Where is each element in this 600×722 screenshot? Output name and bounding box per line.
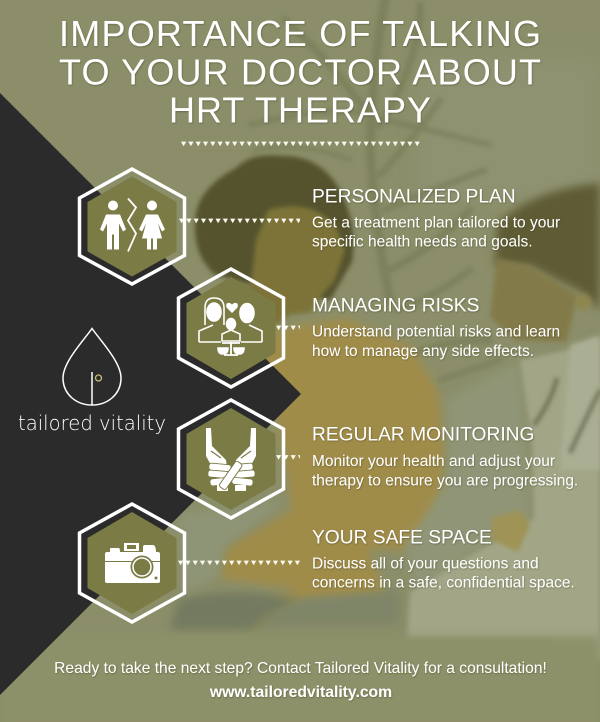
lower left pale area [180,500,285,592]
doctor hair [495,183,600,310]
title: IMPORTANCE OF TALKING [59,13,541,54]
call to action: Ready to take the next step? Contact Tailored Vitality for a consultation! [54,660,547,677]
woman hair [195,155,354,300]
item 3 text: REGULAR MONITORING [312,424,534,446]
hexagon 2: managing risks [178,269,284,387]
title [59,13,541,130]
doctor coat [407,340,600,660]
connector 3 [275,454,300,460]
item 2 text: MANAGING RISKS [312,296,479,316]
hexagon 1: personalized plan [80,169,184,284]
item 3 text: therapy to ensure you are progressing. [312,472,578,490]
item 1 text: specific health needs and goals. [312,234,533,250]
item 4 text: concerns in a safe, confidential space. [312,574,575,592]
hand [492,510,530,552]
connector 1 [178,218,300,224]
item 3 text: Monitor your health and adjust your [312,453,555,470]
icon: camera [105,543,160,583]
dark triangle panel [0,93,301,695]
item 1 text [312,186,560,250]
woman face [240,206,345,335]
title: TO YOUR DOCTOR ABOUT [59,52,541,92]
plant [250,0,500,380]
item 1 text: PERSONALIZED PLAN [312,186,516,208]
item 2 text: Understand potential risks and learn [312,324,560,340]
item 1 text: Get a treatment plan tailored to your [312,214,560,232]
hexagon 4: your safe space [80,504,184,622]
website url: www.tailoredvitality.com [209,684,392,701]
connector 2 [275,325,300,331]
woman torso [220,318,445,628]
icon: bound hands [206,428,256,491]
item 4 text: Discuss all of your questions and [312,556,539,572]
hexagon 3: regular monitoring [178,400,284,518]
icon: man and woman separated [100,198,165,252]
knee [170,592,300,630]
icon: family and scales [199,298,262,355]
logo: tailored vitality [18,328,166,435]
item 3 text [312,424,578,490]
logo mark: drop [63,328,121,405]
title divider [180,141,420,147]
connector 4 [177,560,301,566]
title: HRT THERAPY [169,90,431,130]
item 2 text [312,296,560,360]
item 2 text: how to manage any side effects. [312,343,534,360]
item 4 text: YOUR SAFE SPACE [312,528,492,548]
logo wordmark: tailored vitality [18,411,166,435]
stethoscope [534,378,600,453]
doctor face [490,258,578,342]
item 4 text [312,528,575,592]
